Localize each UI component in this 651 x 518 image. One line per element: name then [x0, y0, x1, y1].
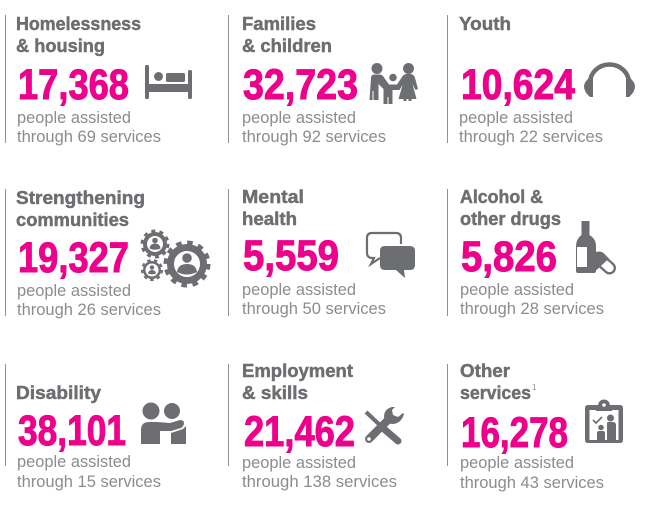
text: people assisted through 50 services [242, 280, 386, 318]
icon: speech bubbles [367, 233, 415, 278]
icon: clipboard with people [585, 400, 623, 443]
heading: other services: Other [460, 361, 510, 381]
number: 5,559: 5,559 [243, 232, 339, 280]
heading: employment and skills: Employment [242, 361, 353, 381]
heading: alcohol and other drugs [460, 187, 561, 229]
text: people assisted through 69 services: through 69 services [17, 127, 161, 146]
heading: other services: 1 [532, 383, 537, 392]
number: 10,624: 10,624 [461, 61, 575, 109]
icon: gears with people [142, 231, 208, 286]
panel: mental health [228, 187, 415, 318]
heading: homelessness and housing: Homelessness [16, 14, 141, 34]
panel: disability [5, 364, 186, 491]
heading: mental health: Mental [242, 187, 304, 207]
icon: two people embracing [141, 402, 186, 444]
number: 16,278: 16,278 [461, 409, 568, 457]
text: people assisted through 69 services [17, 108, 161, 146]
number: 38,101: 38,101 [18, 407, 126, 455]
text: people assisted through 26 services [17, 281, 161, 319]
number: 17,368: 17,368 [18, 61, 129, 109]
text: people assisted through 28 services: people assisted [460, 280, 574, 299]
heading: families and children: Families [242, 14, 316, 34]
heading: other services: services [460, 383, 531, 403]
icon: bottle and pill [576, 221, 615, 273]
text: people assisted through 15 services [17, 452, 161, 491]
heading: mental health: health [242, 209, 297, 229]
heading: mental health [242, 187, 304, 229]
heading: strengthening communities: communities [16, 210, 129, 230]
number: 21,462: 21,462 [244, 408, 355, 456]
text: people assisted through 22 services [459, 108, 603, 146]
heading: employment and skills [242, 361, 353, 403]
panel: other services [447, 361, 623, 492]
text: people assisted through 138 services [242, 453, 397, 491]
icon: family [370, 63, 418, 104]
text: people assisted through 92 services [242, 108, 386, 146]
heading: youth: Youth [459, 14, 511, 34]
text: people assisted through 43 services [460, 453, 604, 492]
text: people assisted through 69 services: people assisted [17, 108, 131, 127]
icon: wrench and screwdriver [366, 407, 404, 441]
icon: bed [145, 65, 192, 99]
panel: homelessness and housing [5, 14, 192, 146]
number: 32,723: 32,723 [243, 61, 358, 109]
text: people assisted through 92 services: people assisted [242, 108, 356, 127]
panel: youth [447, 14, 635, 146]
heading: alcohol and other drugs: other drugs [460, 209, 561, 229]
text: people assisted through 43 services: people assisted [460, 453, 574, 472]
panel: strengthening communities [5, 188, 208, 319]
icon: headphones [584, 64, 635, 97]
heading: homelessness and housing [16, 14, 141, 56]
panel: employment and skills [228, 361, 404, 491]
text: people assisted through 26 services: through 26 services [17, 300, 161, 319]
heading: disability: Disability [16, 383, 101, 403]
heading: other services [460, 361, 537, 403]
text: people assisted through 50 services: through 50 services [242, 299, 386, 318]
heading: alcohol and other drugs: Alcohol & [460, 187, 543, 207]
heading: families and children [242, 14, 332, 56]
number: 19,327: 19,327 [18, 234, 129, 282]
heading: employment and skills: & skills [242, 383, 308, 403]
text: people assisted through 22 services: through 22 services [459, 127, 603, 146]
heading: homelessness and housing: & housing [16, 36, 105, 56]
text: people assisted through 15 services: through 15 services [17, 472, 161, 491]
number: 5,826: 5,826 [461, 233, 557, 281]
text: people assisted through 15 services: people assisted [17, 452, 131, 471]
heading: strengthening communities: Strengthening [16, 188, 145, 208]
heading: strengthening communities [16, 188, 145, 230]
text: people assisted through 22 services: people assisted [459, 108, 573, 127]
text: people assisted through 28 services [460, 280, 604, 318]
text: people assisted through 138 services: through 138 services [242, 472, 397, 491]
panel: families and children [228, 14, 418, 146]
text: people assisted through 28 services: through 28 services [460, 299, 604, 318]
text: people assisted through 138 services: people assisted [242, 453, 356, 472]
text: people assisted through 43 services: through 43 services [460, 473, 604, 492]
text: people assisted through 26 services: people assisted [17, 281, 131, 300]
heading: families and children: & children [242, 36, 332, 56]
panel: alcohol and other drugs [447, 187, 615, 318]
text: people assisted through 50 services: people assisted [242, 280, 356, 299]
text: people assisted through 92 services: through 92 services [242, 127, 386, 146]
